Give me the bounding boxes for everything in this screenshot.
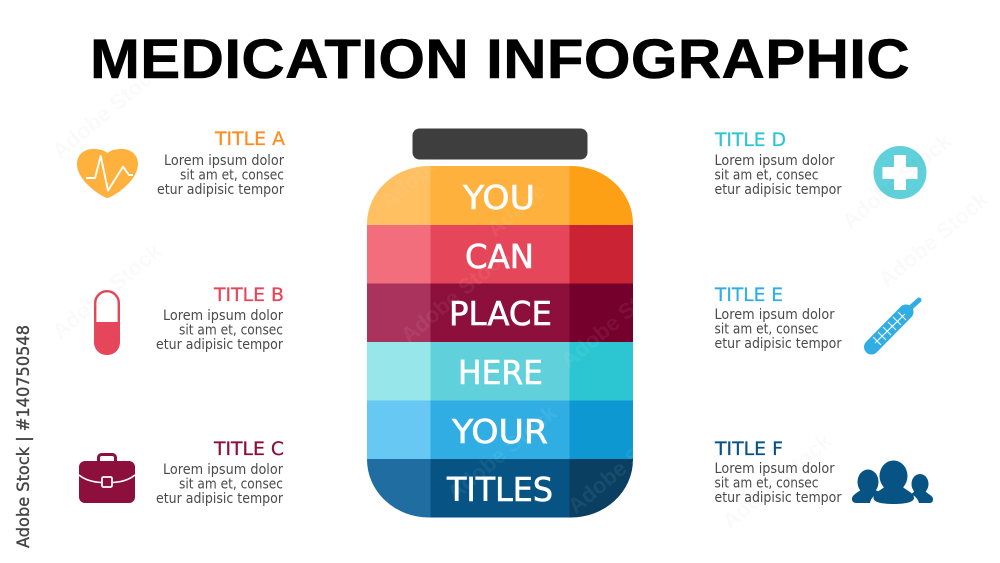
text block: title C: sit am et, consec	[179, 476, 283, 492]
band: can	[367, 225, 634, 284]
text block: title F: etur adipisic tempor	[714, 490, 842, 506]
text block: title C: etur adipisic tempor	[156, 491, 283, 507]
watermarks: Adobe Stock	[556, 267, 676, 373]
text block: title E: Lorem ipsum dolor	[714, 307, 835, 323]
text block: title F: Lorem ipsum dolor	[714, 461, 835, 477]
jar label: you: YOU	[462, 179, 535, 217]
jar lid	[412, 128, 588, 160]
text block: title F: TITLE F	[714, 439, 783, 460]
text block: title E: etur adipisic tempor	[714, 336, 842, 352]
text block: title F: sit am et, consec	[714, 476, 818, 492]
icon: capsule	[94, 291, 120, 355]
watermarks: Adobe	[376, 150, 444, 213]
text block: title A: sit am et, consec	[180, 168, 284, 184]
band: place	[367, 284, 634, 342]
icon: briefcase	[79, 454, 135, 503]
watermarks: Adobe Stock	[442, 400, 562, 506]
watermarks: Adobe Stock	[396, 242, 516, 348]
jar label: here: HERE	[458, 354, 543, 392]
text block: title C: Lorem ipsum dolor	[163, 462, 283, 478]
jar label: titles: TITLES	[446, 471, 553, 509]
text block: title B	[156, 285, 284, 353]
text block: title F	[714, 439, 842, 506]
text block: title E	[714, 285, 842, 352]
text block: title D: TITLE D	[714, 130, 786, 151]
text block: title B: Lorem ipsum dolor	[163, 308, 283, 324]
watermarks: Adobe	[482, 179, 550, 242]
icon: medical cross	[874, 146, 926, 199]
text block: title A: TITLE A	[214, 129, 285, 150]
band: here	[367, 342, 634, 401]
text block: title D: Lorem ipsum dolor	[714, 153, 835, 169]
panel: medicine jar	[367, 166, 634, 518]
text block: title C	[156, 439, 284, 507]
text block: title B: sit am et, consec	[179, 322, 283, 338]
jar label: your: YOUR	[451, 413, 548, 451]
icon: heart with pulse	[77, 149, 138, 198]
band: titles	[367, 459, 634, 518]
text block: title A: Lorem ipsum dolor	[164, 153, 284, 169]
icon: people group	[852, 460, 933, 504]
watermarks: Adobe Stock	[563, 412, 683, 519]
text block: title D	[714, 130, 842, 198]
band: your	[367, 400, 634, 460]
title: MEDICATION INFOGRAPHIC	[90, 29, 910, 91]
band: you	[367, 166, 634, 225]
text block: title D: etur adipisic tempor	[714, 182, 842, 198]
text block: title E: sit am et, consec	[714, 322, 818, 338]
text block: title A	[157, 129, 285, 198]
icon: thermometer	[872, 300, 919, 347]
jar label: place: PLACE	[449, 295, 552, 333]
text block: title D: sit am et, consec	[714, 168, 818, 184]
text block: title B: etur adipisic tempor	[156, 337, 283, 353]
text block: title C: TITLE C	[213, 439, 284, 460]
text block: title A: etur adipisic tempor	[157, 182, 284, 198]
jar label: can: CAN	[465, 238, 534, 276]
text block: title E: TITLE E	[714, 285, 783, 306]
text block: title B: TITLE B	[213, 285, 284, 306]
stock id label: Adobe Stock | #140750548	[14, 325, 33, 548]
